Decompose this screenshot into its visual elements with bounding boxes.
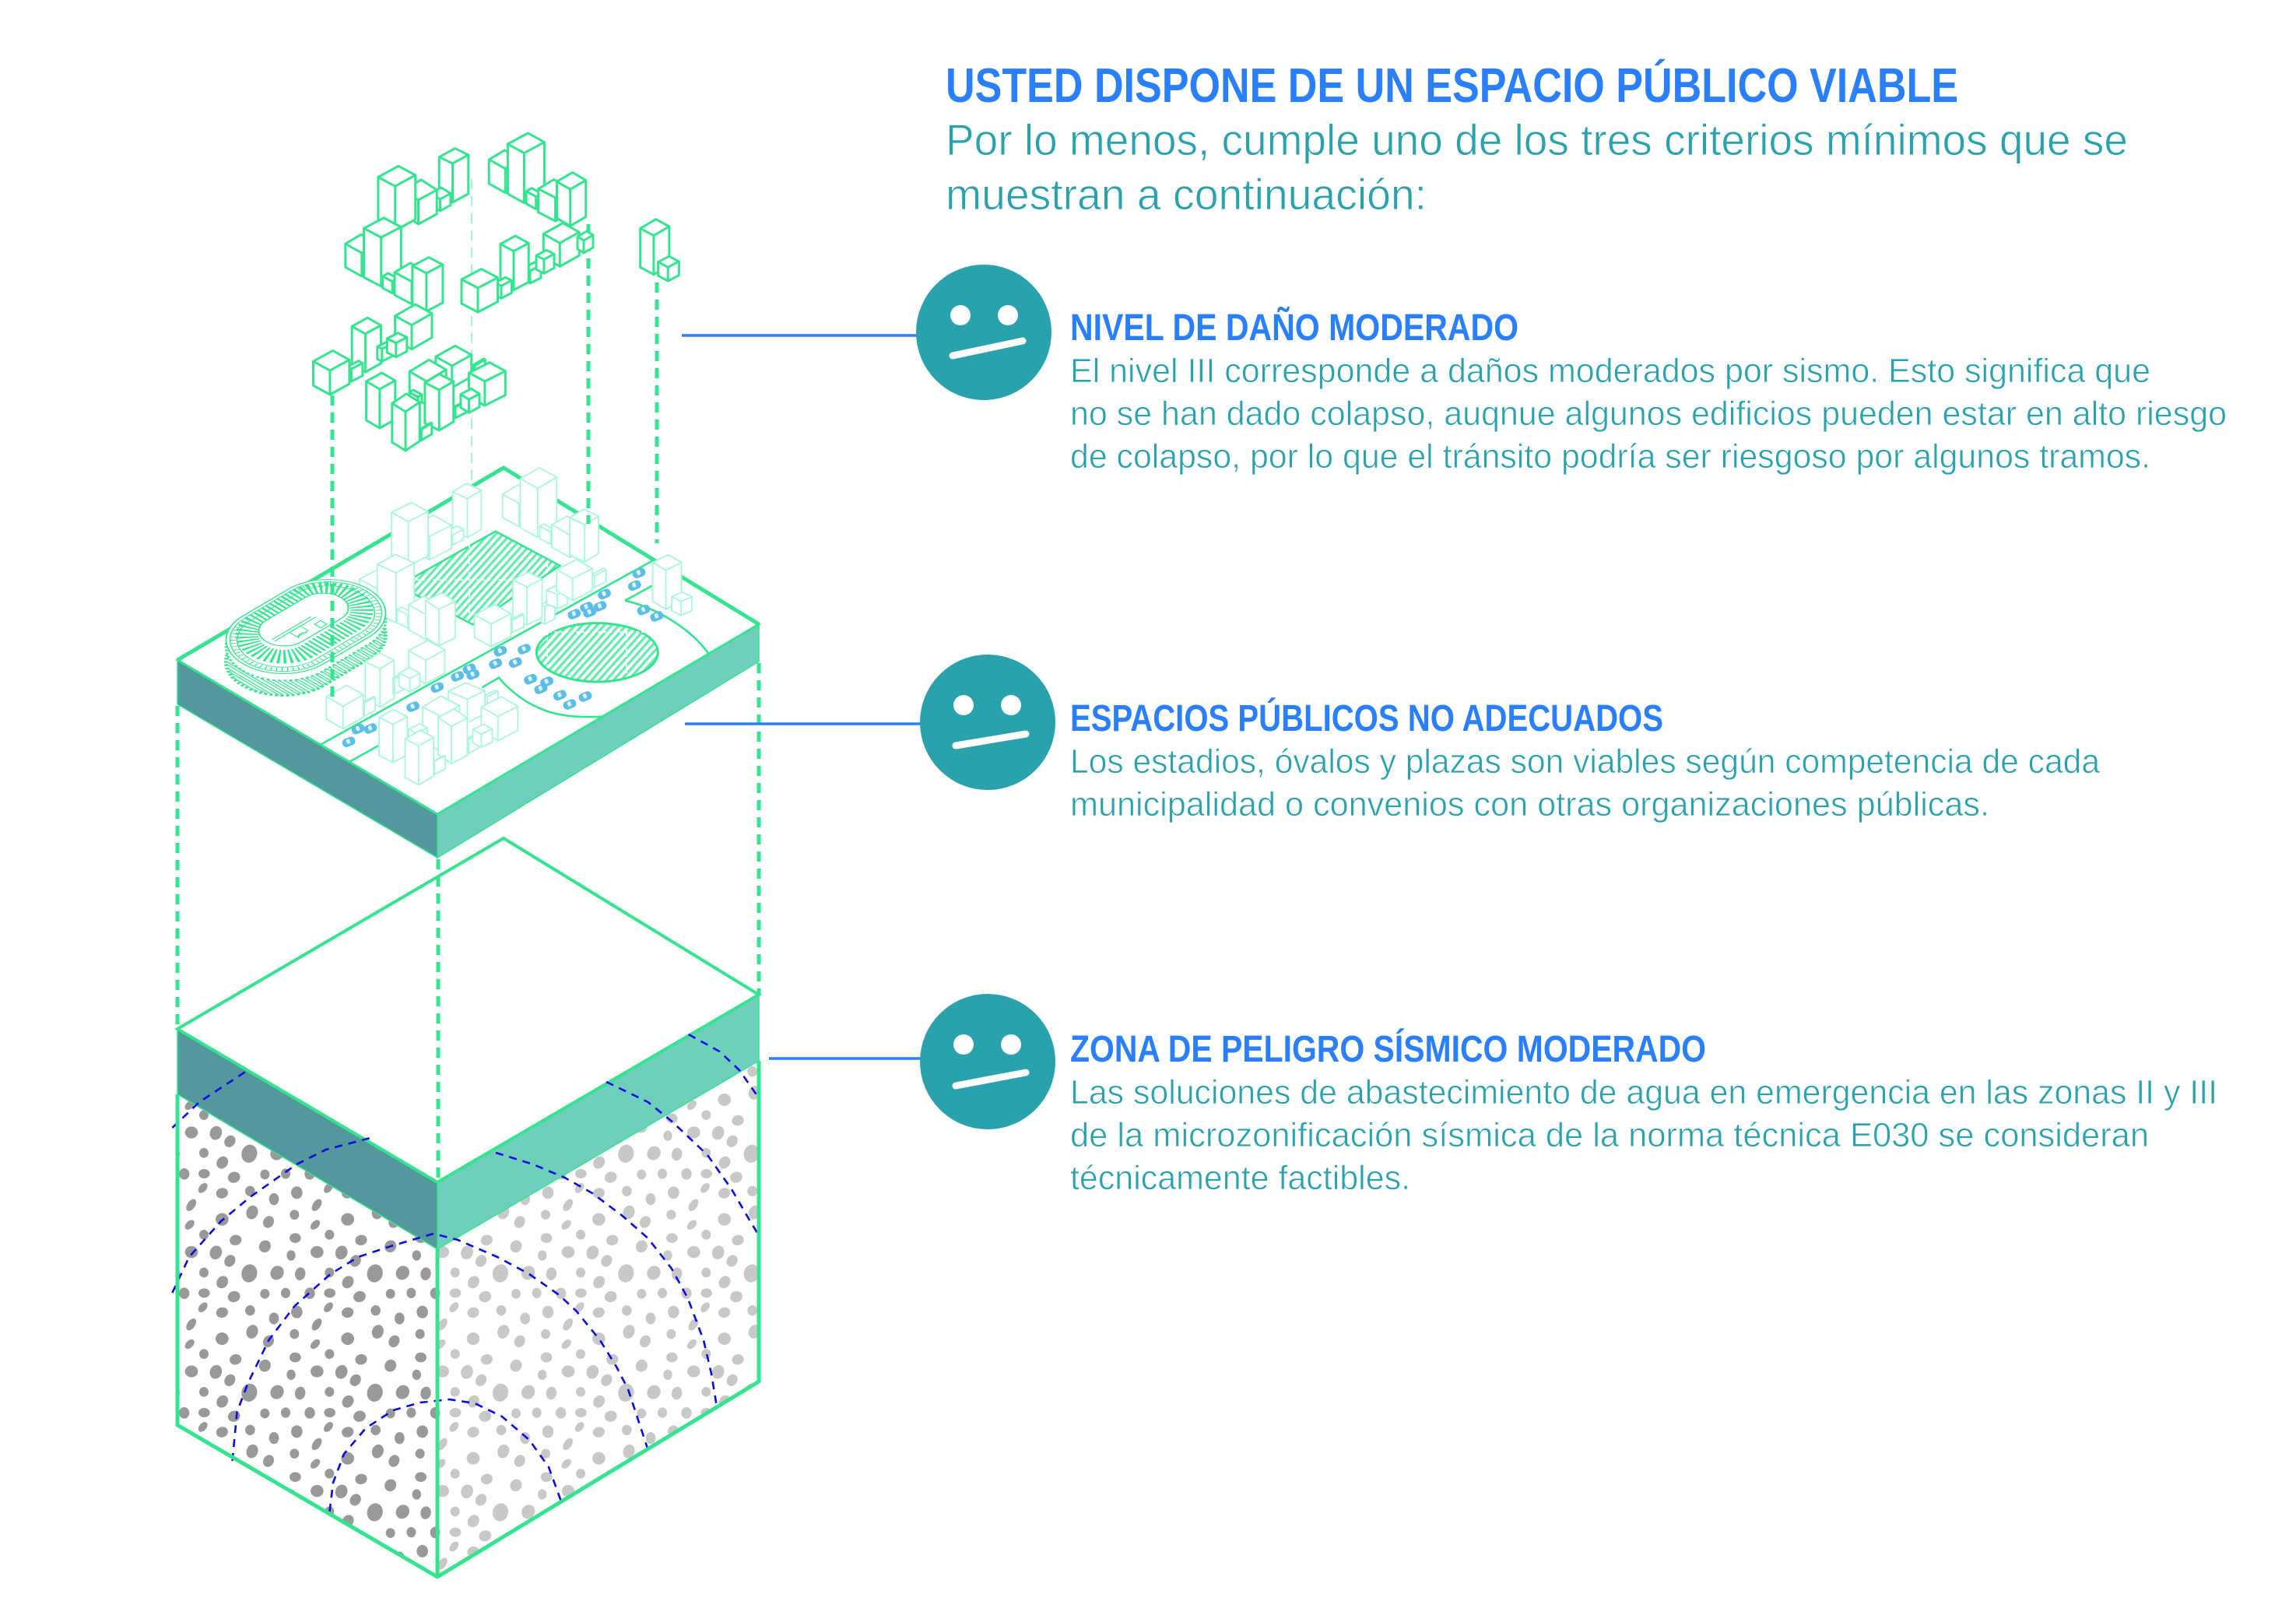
title (946, 59, 2128, 219)
criterion 2: text (1070, 697, 2101, 823)
seismic wave arcs (172, 1034, 759, 1511)
ghost buildings in front of stadium (326, 641, 518, 785)
criterion 1: text: NIVEL DE DAÑO MODERADO (1070, 306, 1518, 349)
band left face (177, 1029, 437, 1249)
thin centre dashed connector (471, 179, 472, 498)
soil box outline (177, 1061, 759, 1577)
top face outline (177, 838, 759, 1182)
criterion 1: text: no se han dado colapso, auqnue algunos edificios pueden estar en alto riesgo (1070, 395, 2227, 433)
floating damaged buildings (313, 133, 679, 451)
criterion 3: text: de la microzonificación sísmica de la norma técnica E030 se consideran (1070, 1116, 2149, 1154)
dashed connectors from floating buildings (332, 224, 657, 697)
hatched oval park (536, 623, 658, 682)
criterion 3: text (1070, 1028, 2217, 1197)
subtitle (946, 115, 2128, 219)
criterion 3: text: Las soluciones de abastecimiento de agua en emergencia en las zonas II y III (1070, 1073, 2217, 1111)
subtitle: Por lo menos, cumple uno de los tres criterios mínimos que se (946, 115, 2128, 164)
block left side (177, 660, 437, 858)
soil left face with dark dots (54, 1048, 557, 1615)
block right side (437, 624, 759, 858)
criterion 1: text: El nivel III corresponde a daños moderados por sismo. Esto significa que (1070, 352, 2150, 390)
dashed connectors between layers (177, 663, 759, 1182)
criterion 3: neutral face icon (920, 994, 1055, 1129)
stadium outer wall (202, 573, 409, 709)
criterion 2: text: Los estadios, óvalos y plazas son viables según competencia de cada (1070, 743, 2101, 781)
criterion 3: leader line (769, 1057, 922, 1060)
criterion 1: leader line (682, 334, 918, 337)
criterion 1: text (1070, 306, 2227, 476)
subtitle: muestran a continuación: (946, 170, 1427, 219)
wall window row (202, 573, 409, 694)
hatched plaza (414, 532, 560, 625)
criterion 3: text: técnicamente factibles. (1070, 1159, 1410, 1197)
cars (341, 567, 665, 749)
stadium roof and stands (202, 566, 409, 687)
ghost buildings on block (360, 468, 692, 647)
criterion 2: text: municipalidad o convenios con otras organizaciones públicas. (1070, 785, 1989, 823)
criterion 1: text: de colapso, por lo que el tránsito podría ser riesgoso por algunos tramos. (1070, 437, 2150, 476)
criterion 3: text: ZONA DE PELIGRO SÍSMICO MODERADO (1070, 1028, 1706, 1070)
block top face (177, 468, 759, 814)
criterion 2: text: ESPACIOS PÚBLICOS NO ADECUADOS (1070, 697, 1663, 739)
city block (177, 468, 759, 858)
wall arches (202, 588, 409, 709)
block back edges (177, 468, 759, 660)
stadium (202, 566, 409, 709)
criterion 2: neutral face icon (920, 655, 1055, 790)
main heading: USTED DISPONE DE UN ESPACIO PÚBLICO VIABLE (946, 59, 1958, 113)
criterion 2: leader line (685, 722, 922, 725)
band right face (437, 995, 759, 1249)
criterion 1: neutral face icon (916, 265, 1051, 400)
roads (321, 561, 708, 761)
soil block: seismic zone (54, 838, 809, 1615)
soil right face with light dots (430, 1048, 809, 1615)
